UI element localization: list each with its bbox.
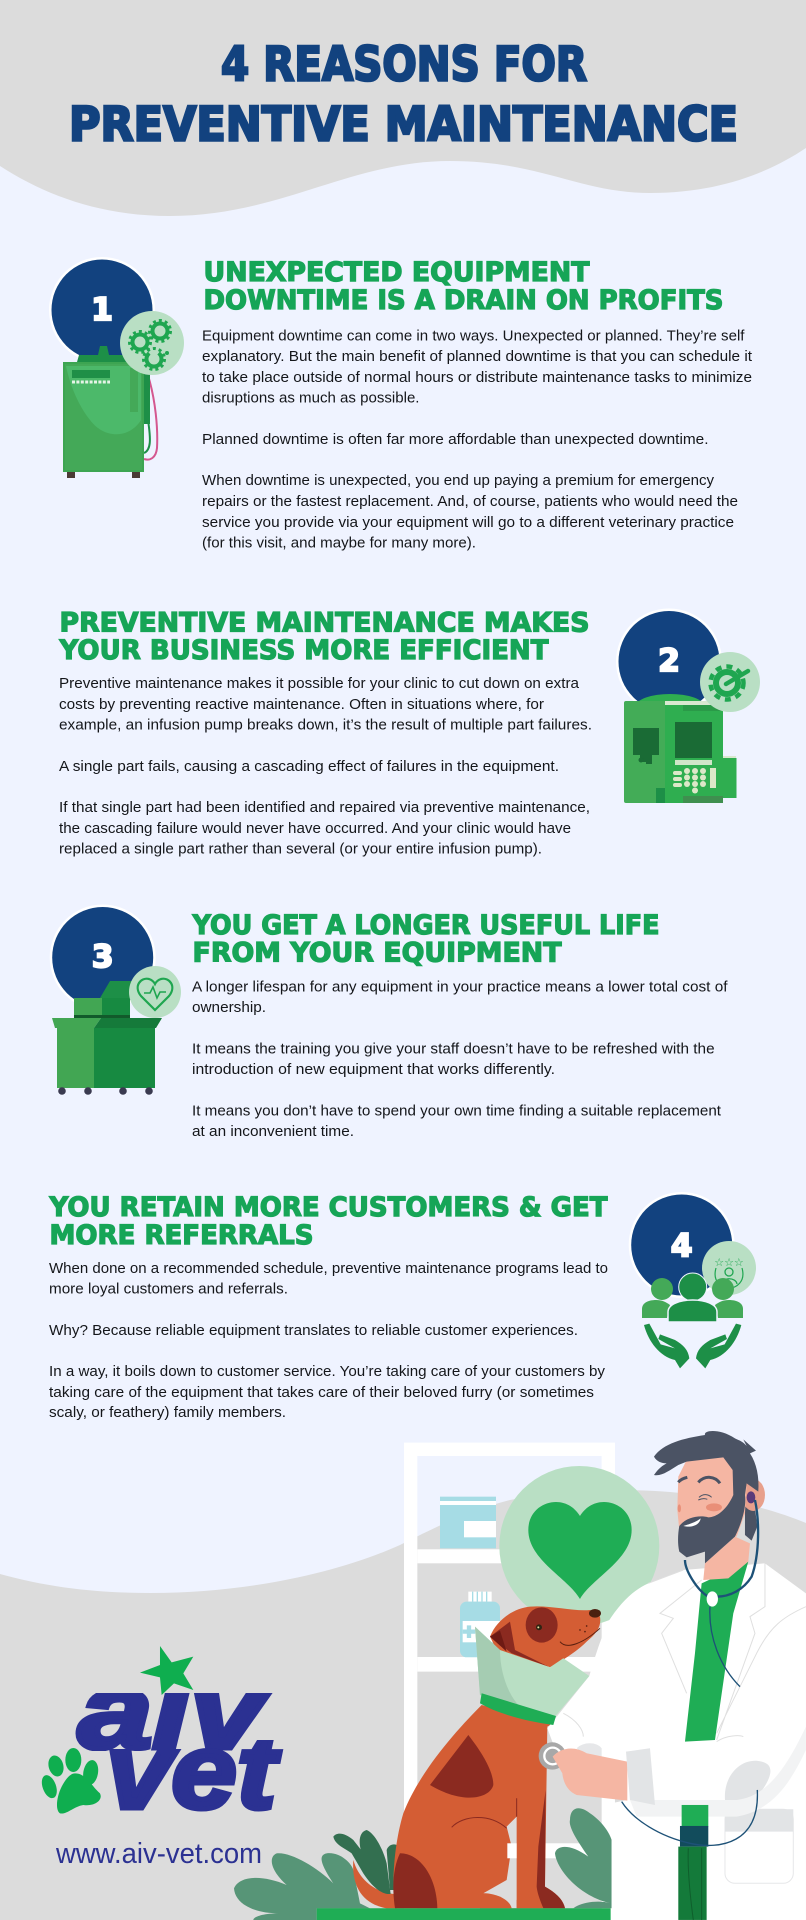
body text 2: Preventive maintenance makes it possible for your clinic to cut down on extra [59,675,580,692]
section 1: unexpected downtime [49,257,753,552]
number badge 1 [49,257,155,363]
logo wordmark: aiv [78,1651,271,1771]
star [140,1646,193,1695]
heading 2: YOUR BUSINESS MORE EFFICIENT [59,635,549,666]
medicine shelf [404,1443,615,1920]
icon: open box on cart [52,981,162,1095]
right leaves [555,1808,612,1908]
body text 2: example, an infusion pump breaks down, it’s the result of multiple part failures. [59,717,592,734]
body text 2: If that single part had been identified and repaired via preventive maintenance, [59,799,590,816]
hand with chest piece [539,1742,655,1805]
body text 4: more loyal customers and referrals. [49,1280,288,1297]
body text 2: the cascading failure would never have occurred. And your clinic would have [59,820,571,837]
body text 1: Equipment downtime can come in two ways. Unexpected or planned. They’re self [202,327,745,344]
vet head [654,1431,765,1580]
dog head and cone [475,1606,601,1725]
number badge 1: 1 [91,292,113,328]
AIV Vet logo [39,1646,281,1831]
stethoscope [622,1500,758,1845]
number badge 3 [50,904,156,1010]
shirt and tie [678,1562,748,1920]
top grey wave header [0,0,806,216]
body text 4: In a way, it boils down to customer service. You’re taking care of your customers by [49,1363,606,1380]
number badge 2: 2 [658,643,680,679]
body text 2: A single part fails, causing a cascading effect of failures in the equipment. [59,758,559,775]
section 2: efficiency [59,608,760,858]
green table edge [317,1908,611,1920]
body text 4: scaly, or feathery) family members. [49,1404,286,1421]
title: 4 REASONS FOR [221,38,587,92]
body text 2 [59,675,592,858]
left leaves and tail [234,1830,397,1920]
body text 4: taking care of the equipment that takes care of their beloved furry (or sometimes [49,1384,594,1401]
section 4: customers and referrals [49,1192,756,1421]
body text 3: introduction of new equipment that works differently. [192,1061,555,1078]
number badge 4: 4 [671,1228,692,1264]
icon: equipment cabinet [63,346,157,478]
body text 2: replaced a single part rather than several (or your entire infusion pump). [59,841,542,858]
icon: infusion pump [624,694,736,803]
body text 3: It means you don’t have to spend your own time finding a suitable replacement [192,1102,722,1119]
heading 3: FROM YOUR EQUIPMENT [192,938,562,968]
body text 3: It means the training you give your staff doesn’t have to be refreshed with the [192,1040,715,1057]
icon: gear and wrench badge [700,652,760,712]
heading 4: MORE REFERRALS [50,1220,314,1251]
body text 3: ownership. [192,999,266,1016]
logo wordmark [76,1693,284,1812]
heading 1: DOWNTIME IS A DRAIN ON PROFITS [204,285,724,316]
body text 1: repairs or the fastest replacement. And, of course, patients who would need the [202,493,738,510]
heading 4: YOU RETAIN MORE CUSTOMERS & GET [49,1192,608,1223]
veterinary illustration [317,1431,806,1920]
body text 3: A longer lifespan for any equipment in your practice means a lower total cost of [192,978,728,995]
body text 3 [192,978,728,1140]
heading 4 [49,1192,608,1251]
title [69,38,738,152]
number badge 4 [629,1192,735,1298]
bottom grey wave [0,1490,806,1920]
body text 1: to take place outside of normal hours or distribute maintenance tasks to minimize [202,369,752,386]
body text 1: (for this visit, and maybe for many more). [202,534,476,552]
body text 1: disruptions as much as possible. [202,390,420,406]
heading 3 [192,910,660,968]
number badge 3: 3 [92,939,113,975]
icon: customers held in hands [642,1273,743,1368]
paw print [39,1748,101,1814]
number badge 2 [616,608,722,714]
body text 4: Why? Because reliable equipment translates to reliable customer experiences. [49,1322,578,1339]
icon: stars and person badge: ☆☆☆ [714,1256,744,1269]
heading 1 [204,257,724,316]
heading 2 [59,608,589,666]
heart speech bubble [499,1466,659,1626]
icon: heart monitor badge [129,966,181,1018]
body text 4: When done on a recommended schedule, preventive maintenance programs lead to [49,1260,608,1277]
logo wordmark: vet [106,1711,281,1831]
vet coat [547,1563,806,1920]
icon: gears badge [120,311,184,375]
body text 1: explanatory. But the main benefit of planned downtime is that you can schedule it [202,348,753,365]
body text 3: at an inconvenient time. [192,1123,354,1140]
section 3: longer useful life [50,904,728,1140]
website url: www.aiv-vet.com [55,1838,262,1870]
body text 1: Planned downtime is often far more affordable than unexpected downtime. [202,431,708,448]
heading 1: UNEXPECTED EQUIPMENT [204,257,590,288]
body text 2: costs by preventing reactive maintenance. Often in situations where, for [59,696,544,713]
body text 1: service you provide via your equipment will go to a different veterinary practice [202,514,734,531]
heading 3: YOU GET A LONGER USEFUL LIFE [192,910,660,941]
title: PREVENTIVE MAINTENANCE [69,98,738,152]
dog body [393,1705,565,1908]
heading 2: PREVENTIVE MAINTENANCE MAKES [60,608,590,639]
body text 1: When downtime is unexpected, you end up paying a premium for emergency [202,472,714,489]
icon: stars and person badge [702,1241,756,1295]
body text 4 [49,1260,608,1421]
body text 1 [202,327,753,552]
